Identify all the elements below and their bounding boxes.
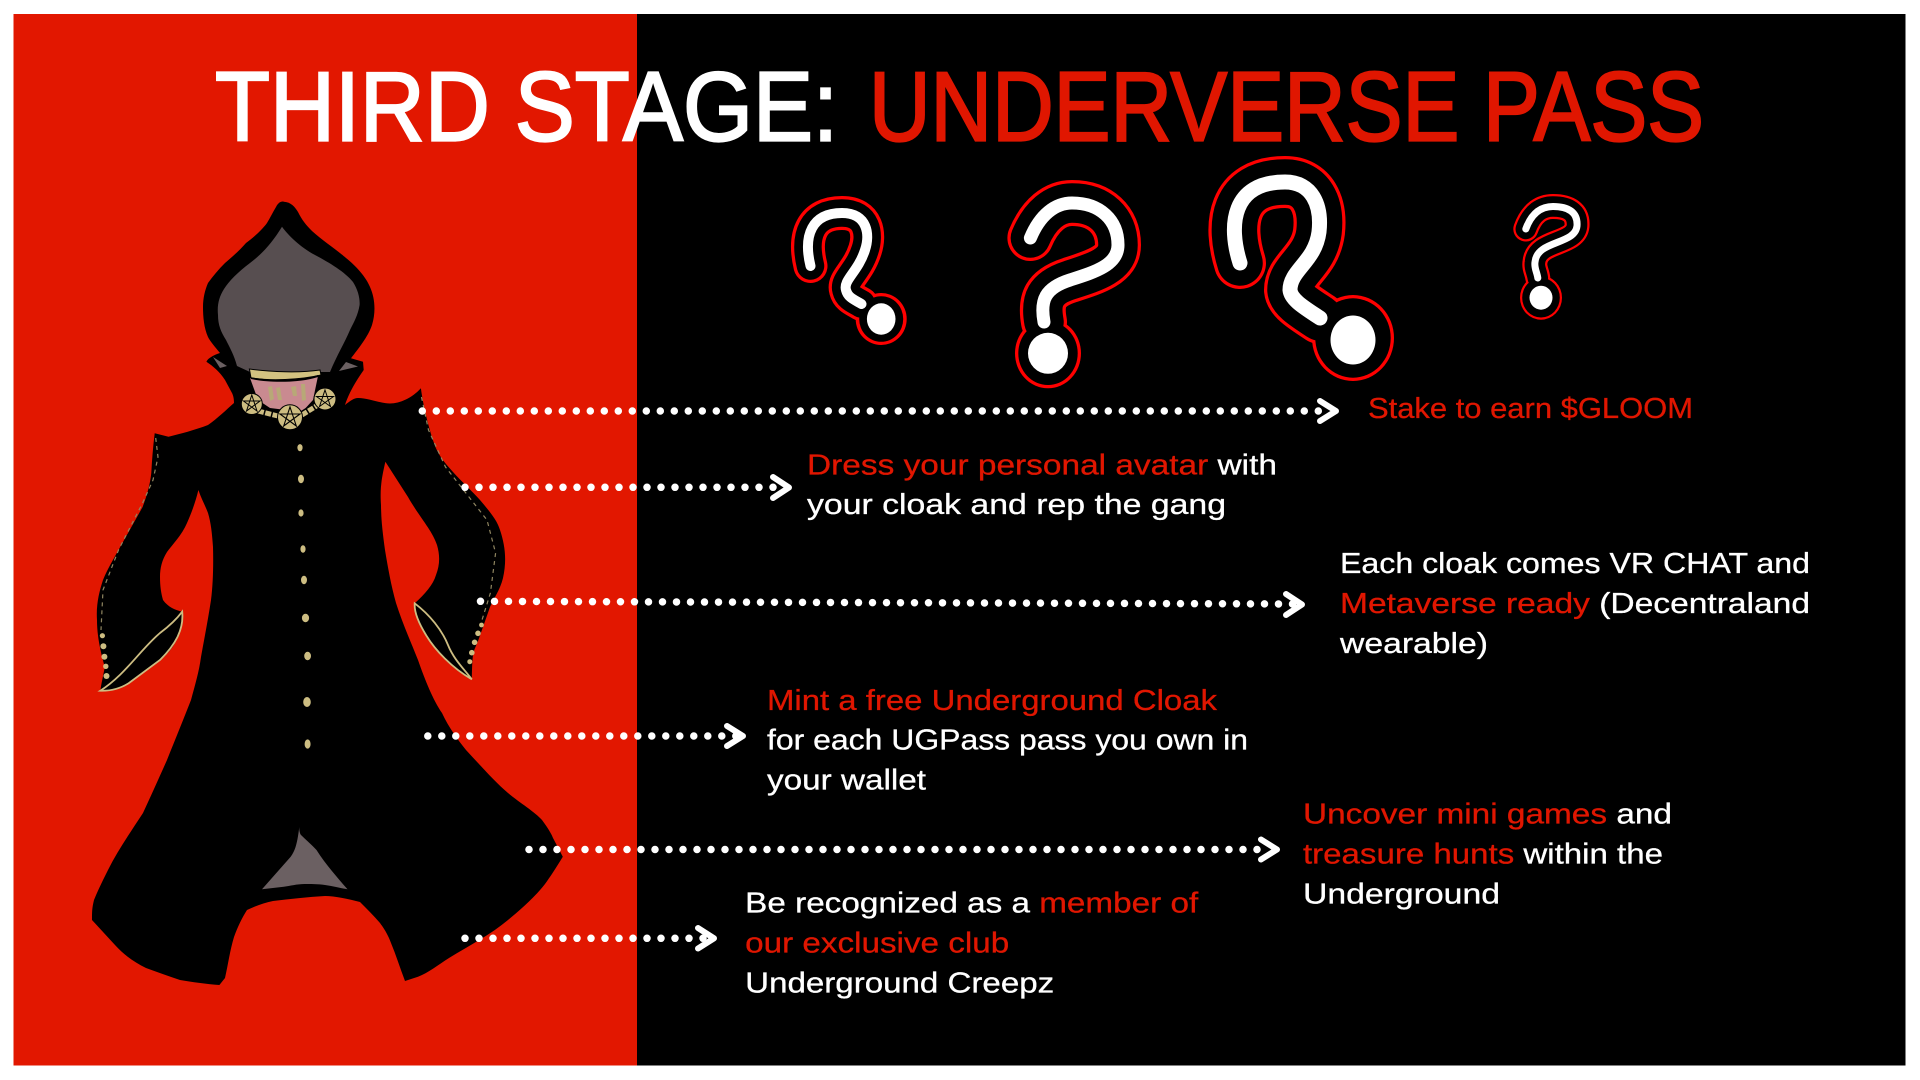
coat front vent xyxy=(262,827,348,889)
arrow: to stake xyxy=(422,401,1336,421)
text block: metaverse: wearable) xyxy=(1339,628,1488,660)
text block: mint: your wallet xyxy=(767,764,926,796)
title xyxy=(215,52,1704,162)
icon: question mark 3 xyxy=(1234,182,1394,381)
text block: mini games: treasure hunts within the xyxy=(1303,838,1663,870)
text block: club: Be recognized as a member of xyxy=(745,888,1198,920)
text block: stake: Stake to earn $GLOOM xyxy=(1368,393,1693,425)
panel: red left background xyxy=(14,14,637,1066)
sleeve stitching and dots xyxy=(100,397,496,679)
left cuff xyxy=(100,612,182,691)
text block: metaverse: Each cloak comes VR CHAT and xyxy=(1340,548,1810,580)
necklace with pentagrams xyxy=(241,388,336,430)
illustration: black cloak figure xyxy=(92,202,563,985)
panel: black right background xyxy=(637,14,1906,1066)
arrow: to avatar xyxy=(465,477,789,498)
coat buttons xyxy=(297,444,311,749)
arrow: to mint xyxy=(428,726,743,746)
icon: question mark 4 xyxy=(1520,206,1577,320)
text block: club: Underground Creepz xyxy=(745,968,1054,1000)
arrow: to metaverse xyxy=(480,594,1302,615)
text block: club: our exclusive club xyxy=(745,928,1009,960)
icon: question mark 2 xyxy=(1015,203,1118,388)
cloak silhouette xyxy=(92,202,563,985)
collar flaps xyxy=(213,357,358,371)
arrow: to club xyxy=(465,928,714,948)
hood opening xyxy=(218,227,360,372)
mouth xyxy=(249,369,321,412)
title: THIRD STAGE: xyxy=(215,52,838,162)
text block: mint xyxy=(767,685,1248,796)
text block: avatar: Dress your personal avatar with xyxy=(807,450,1277,482)
text block: mint: for each UGPass pass you own in xyxy=(767,724,1248,756)
icon: question mark 1 xyxy=(808,213,907,345)
title: UNDERVERSE PASS xyxy=(869,52,1704,162)
text block: mini games: Underground xyxy=(1303,878,1500,910)
arrow: to mini games xyxy=(529,840,1277,860)
text block: metaverse: Metaverse ready (Decentraland xyxy=(1340,588,1810,620)
text block: mint: Mint a free Underground Cloak xyxy=(767,685,1218,717)
text block: mini games: Uncover mini games and xyxy=(1303,798,1672,830)
text block: mini games xyxy=(1303,798,1672,910)
text block: avatar xyxy=(807,450,1277,521)
text block: metaverse xyxy=(1339,548,1810,660)
right cuff xyxy=(415,603,472,679)
text block: avatar: your cloak and rep the gang xyxy=(807,489,1226,521)
text block: club xyxy=(745,888,1198,1000)
